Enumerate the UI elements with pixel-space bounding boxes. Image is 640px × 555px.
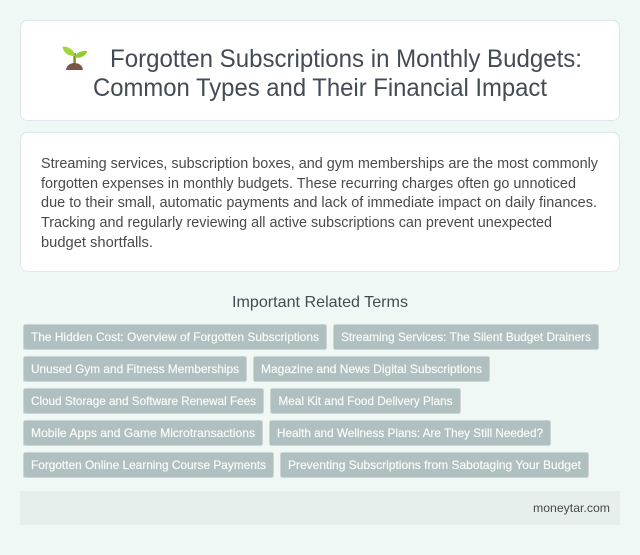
tag: The Hidden Cost: Overview of Forgotten Subscriptions [31, 330, 319, 344]
title panel [20, 20, 620, 120]
heading: Forgotten Subscriptions in Monthly Budgets: [110, 45, 582, 73]
tag [24, 452, 274, 478]
summary text: budget shortfalls. [41, 235, 153, 251]
tag [280, 452, 588, 478]
tag: Mobile Apps and Game Microtransactions [31, 426, 255, 440]
tag: Magazine and News Digital Subscriptions [261, 362, 482, 376]
section heading: important related terms: Important Related Terms [232, 294, 408, 311]
summary text: Tracking and regularly reviewing all active subscriptions can prevent unexpected [41, 215, 552, 231]
tag [270, 388, 460, 414]
summary text: due to their small, automatic payments and lack of immediate impact on daily finances. [41, 195, 597, 211]
tag: Cloud Storage and Software Renewal Fees [31, 394, 256, 408]
tag: Health and Wellness Plans: Are They Still Needed? [277, 426, 543, 440]
footer source: moneytar.com [533, 501, 610, 515]
summary text: Streaming services, subscription boxes, and gym memberships are the most commonly [41, 156, 599, 172]
tag [24, 356, 246, 382]
tag [270, 420, 550, 446]
tag [334, 324, 598, 350]
heading [93, 45, 582, 102]
tag: Forgotten Online Learning Course Payments [31, 458, 266, 472]
heading: Common Types and Their Financial Impact [93, 74, 547, 102]
tag [24, 420, 262, 446]
footer bar [20, 491, 620, 525]
icon: seedling [62, 47, 87, 70]
tag [24, 324, 326, 350]
summary text [41, 156, 599, 251]
tag: Preventing Subscriptions from Sabotaging Your Budget [288, 458, 582, 472]
summary text: forgotten expenses in monthly budgets. These recurring charges often go unnoticed [41, 176, 576, 192]
tag: Streaming Services: The Silent Budget Drainers [341, 330, 591, 344]
panel: summary [20, 132, 620, 272]
tag [24, 388, 264, 414]
tag [254, 356, 490, 382]
tag: Unused Gym and Fitness Memberships [31, 362, 239, 376]
tag: Meal Kit and Food Delivery Plans [278, 394, 452, 408]
tag list [24, 324, 598, 478]
